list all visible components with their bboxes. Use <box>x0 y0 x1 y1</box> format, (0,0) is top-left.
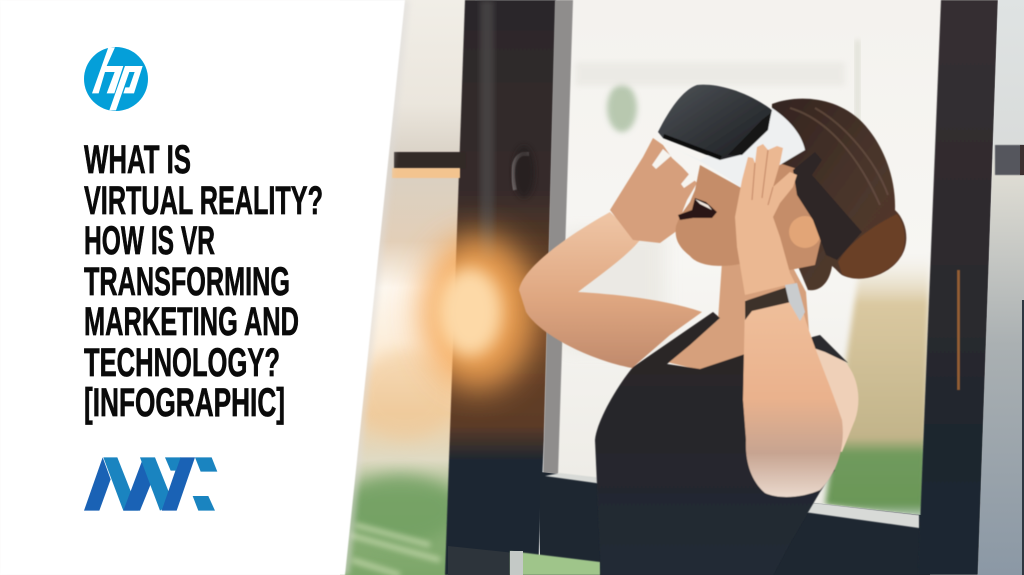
icon: MTC logo <box>84 457 217 511</box>
headset <box>658 85 862 260</box>
window lower frame <box>448 472 930 575</box>
front hand on headset <box>735 144 797 295</box>
mouth <box>678 198 717 220</box>
wristwatch <box>745 283 805 321</box>
title: HOW IS VR <box>84 219 215 263</box>
face <box>676 160 822 270</box>
panel: photo of woman wearing VR headset <box>340 0 1024 575</box>
grey wall panel right <box>978 0 1024 575</box>
background window view left <box>340 0 475 575</box>
back shoulder arm <box>790 330 858 452</box>
woman <box>519 85 906 575</box>
inner window frame strip <box>543 0 573 477</box>
title: WHAT IS <box>84 138 191 182</box>
neck and chest <box>667 262 810 370</box>
headset strap <box>793 152 862 260</box>
near hand <box>610 138 697 243</box>
window frame left sash <box>392 0 556 575</box>
title: VIRTUAL REALITY? <box>84 179 323 223</box>
ear <box>789 216 821 248</box>
dress <box>595 312 848 575</box>
raised near arm <box>519 212 702 368</box>
hair <box>770 99 906 290</box>
icon: HP logo <box>84 47 148 111</box>
title <box>84 138 323 425</box>
title: [INFOGRAPHIC] <box>84 381 285 425</box>
front forearm <box>743 298 843 497</box>
background window view centre <box>545 0 945 525</box>
panel: white title area with slanted edge <box>0 0 410 575</box>
title: MARKETING AND <box>84 300 299 344</box>
headset white body <box>667 108 805 187</box>
window frame right <box>918 0 998 575</box>
title: TRANSFORMING <box>84 260 290 304</box>
title: TECHNOLOGY? <box>84 341 280 385</box>
headset dark visor <box>658 85 772 160</box>
